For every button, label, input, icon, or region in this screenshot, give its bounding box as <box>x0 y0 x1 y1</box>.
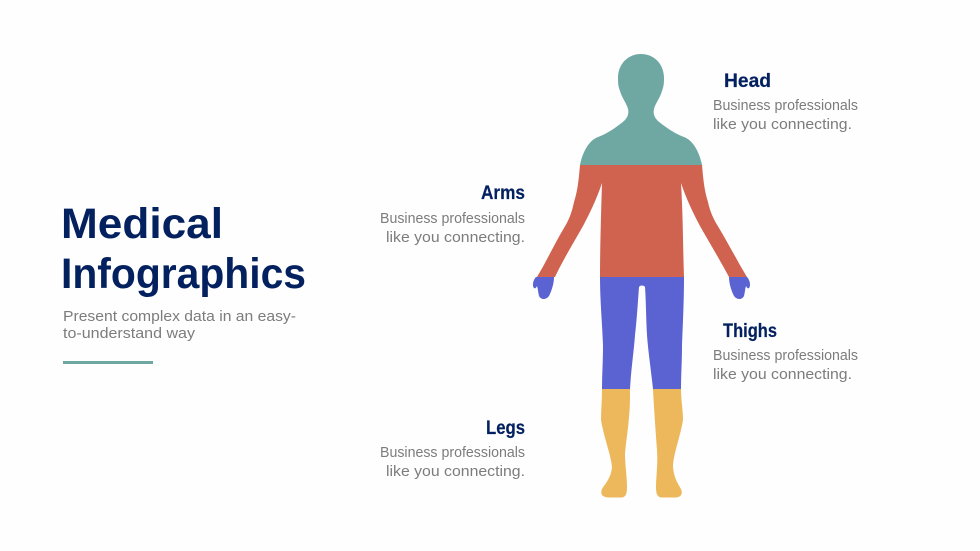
body part: left leg <box>601 389 630 498</box>
body part: right hand <box>729 277 750 299</box>
accent line <box>63 361 153 364</box>
label: head: Head <box>724 71 771 92</box>
body part: left hand <box>533 277 554 299</box>
subtitle: Present complex data in an easy- <box>63 308 296 325</box>
label: arms: like you connecting. <box>386 229 525 246</box>
body part: thighs <box>600 277 684 389</box>
title: Infographics <box>61 250 306 298</box>
body part: right leg <box>653 389 683 498</box>
label: thighs: Business professionals <box>713 347 858 364</box>
body part: head and shoulders <box>580 54 702 165</box>
label: thighs: Thighs <box>723 321 777 342</box>
label: head <box>713 71 858 133</box>
title <box>61 200 306 298</box>
subtitle: to-understand way <box>63 325 196 342</box>
body part: arms and torso <box>537 165 747 277</box>
human body figure <box>533 54 750 498</box>
label: arms: Business professionals <box>380 210 525 227</box>
label: legs <box>380 418 525 480</box>
title: Medical <box>61 200 223 248</box>
label: legs: like you connecting. <box>386 463 525 480</box>
label: head: Business professionals <box>713 97 858 114</box>
label: thighs: like you connecting. <box>713 366 852 383</box>
label: legs: Legs <box>486 418 525 439</box>
subtitle <box>63 308 296 342</box>
label: legs: Business professionals <box>380 444 525 461</box>
label: arms: Arms <box>481 183 525 204</box>
label: arms <box>380 183 525 246</box>
label: head: like you connecting. <box>713 116 852 133</box>
label: thighs <box>713 321 858 383</box>
